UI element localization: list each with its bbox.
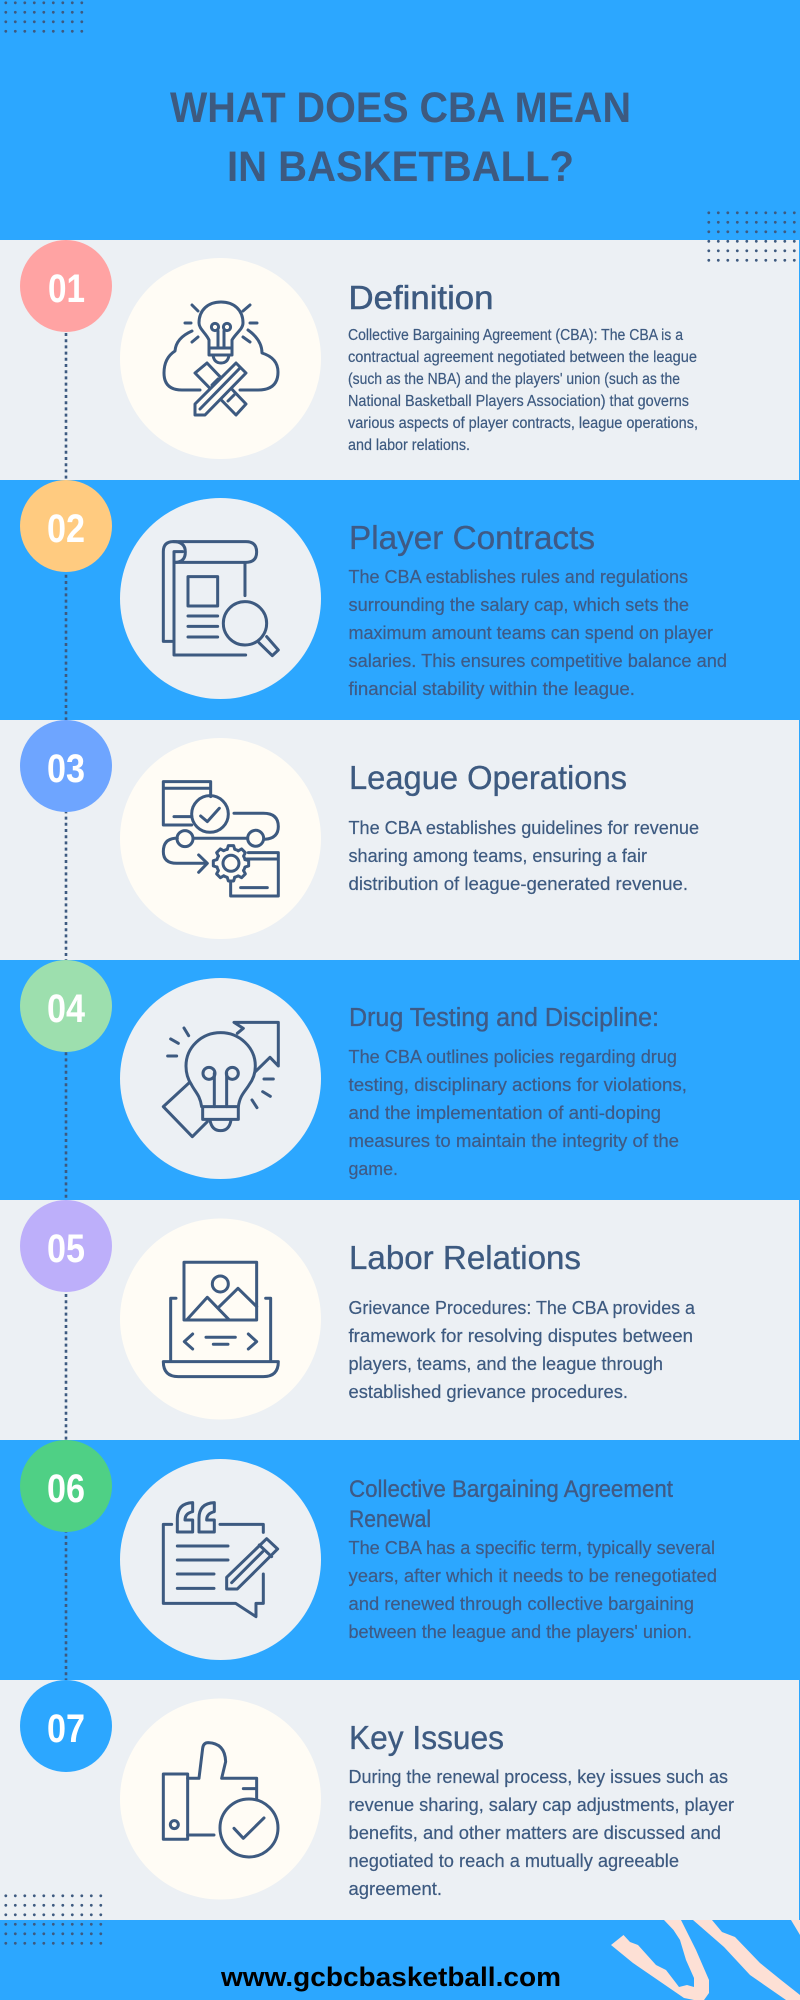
body text: definition xyxy=(348,327,698,454)
title xyxy=(170,84,631,191)
icon: bulb over cloud with crossed tools xyxy=(164,302,278,415)
body text: definition: Collective Bargaining Agreement (CBA): The CBA is a xyxy=(348,327,683,344)
body text: key issues: negotiated to reach a mutually agreeable xyxy=(348,1851,679,1871)
number badge 05 xyxy=(20,1200,112,1292)
panel: 03 league operations xyxy=(20,720,699,939)
body text: drug testing: and the implementation of anti-doping xyxy=(348,1103,661,1123)
body text: league operations: sharing among teams, ensuring a fair xyxy=(348,846,647,866)
body text: drug testing: measures to maintain the integrity of the xyxy=(348,1131,679,1151)
heading: collective bargaining agreement renewal: Collective Bargaining Agreement xyxy=(349,1476,673,1503)
heading: key issues: Key Issues xyxy=(349,1719,504,1756)
number badge 05: 05 xyxy=(47,1227,85,1271)
body text: key issues: During the renewal process, key issues such as xyxy=(348,1767,728,1787)
number badge 04 xyxy=(20,960,112,1052)
heading: drug testing and discipline: Drug Testing and Discipline: xyxy=(349,1004,659,1032)
number badge 07: 07 xyxy=(47,1707,85,1751)
panel: 06 agreement renewal xyxy=(20,1440,717,1660)
body text: labor relations: established grievance procedures. xyxy=(348,1382,628,1402)
body text: key issues: benefits, and other matters are discussed and xyxy=(348,1823,721,1843)
number badge 01: 01 xyxy=(48,267,85,311)
icon: document with magnifier xyxy=(163,542,278,656)
body text: definition: contractual agreement negotiated between the league xyxy=(348,349,697,366)
number badge 02 xyxy=(20,480,112,572)
panel: 02 player contracts xyxy=(20,480,727,699)
body text: drug testing: The CBA outlines policies regarding drug xyxy=(348,1047,677,1067)
icon circle 04 xyxy=(120,978,321,1179)
body text: definition: and labor relations. xyxy=(348,437,470,454)
icon circle 03 xyxy=(120,738,321,939)
body text: player contracts: maximum amount teams can spend on player xyxy=(348,623,713,643)
panel: 07 key issues xyxy=(20,1680,734,1900)
body text: key issues xyxy=(348,1767,734,1899)
icon circle 02 xyxy=(120,498,321,699)
body text: agreement renewal: The CBA has a specific term, typically several xyxy=(348,1538,715,1558)
icon circle 06 xyxy=(120,1459,321,1660)
body text: player contracts: financial stability within the league. xyxy=(348,679,635,699)
icon circle 07 xyxy=(120,1698,321,1900)
body text: league operations: distribution of league-generated revenue. xyxy=(348,874,688,894)
body text: drug testing xyxy=(348,1047,687,1179)
body text: drug testing: game. xyxy=(348,1159,398,1179)
number badge 07 xyxy=(20,1680,112,1772)
icon circle 05 xyxy=(120,1218,321,1420)
body text: player contracts: The CBA establishes rules and regulations xyxy=(348,567,688,587)
body text: agreement renewal: between the league and the players' union. xyxy=(348,1622,692,1642)
body text: definition: various aspects of player contracts, league operations, xyxy=(348,415,698,432)
number badge 01 xyxy=(20,240,112,332)
body text: agreement renewal xyxy=(348,1538,717,1642)
icon circle 01 xyxy=(120,258,321,459)
body text: player contracts: surrounding the salary cap, which sets the xyxy=(348,595,689,615)
body text: definition: National Basketball Players Association) that governs xyxy=(348,393,689,410)
icon: bulb with arrow xyxy=(163,1022,278,1137)
body text: agreement renewal: years, after which it needs to be renegotiated xyxy=(348,1566,717,1586)
body text: definition: (such as the NBA) and the players' union (such as the xyxy=(348,371,680,388)
dot pattern: top left xyxy=(4,1,89,39)
number badge 03: 03 xyxy=(47,747,85,791)
timeline dotted connector xyxy=(65,333,67,1680)
number badge 02: 02 xyxy=(47,507,85,551)
body text: labor relations: Grievance Procedures: The CBA provides a xyxy=(348,1298,696,1318)
icon: quote bubble with pencil xyxy=(163,1503,278,1617)
heading: collective bargaining agreement renewal: Renewal xyxy=(349,1506,431,1533)
title: WHAT DOES CBA MEAN xyxy=(170,84,631,132)
heading: labor relations: Labor Relations xyxy=(349,1239,581,1276)
number badge 06 xyxy=(20,1440,112,1532)
body text: agreement renewal: and renewed through collective bargaining xyxy=(348,1594,694,1614)
body text: player contracts xyxy=(348,567,727,699)
number badge 03 xyxy=(20,720,112,812)
body text: labor relations xyxy=(348,1298,696,1402)
icon: workflow with gear xyxy=(163,782,278,896)
number badge 04: 04 xyxy=(47,987,86,1031)
icon: thumbs up with check xyxy=(163,1743,278,1857)
body text: league operations: The CBA establishes guidelines for revenue xyxy=(348,818,699,838)
heading: league operations: League Operations xyxy=(349,759,627,796)
body text: drug testing: testing, disciplinary actions for violations, xyxy=(348,1075,687,1095)
body text: key issues: agreement. xyxy=(348,1879,442,1899)
body text: player contracts: salaries. This ensures competitive balance and xyxy=(348,651,727,671)
heading: definition: Definition xyxy=(348,279,494,316)
panel: 04 drug testing and discipline xyxy=(20,960,687,1179)
panel: 05 labor relations xyxy=(20,1200,696,1420)
body text: labor relations: players, teams, and the league through xyxy=(348,1354,663,1374)
body text: key issues: revenue sharing, salary cap adjustments, player xyxy=(348,1795,734,1815)
body text: labor relations: framework for resolving disputes between xyxy=(348,1326,693,1346)
title: IN BASKETBALL? xyxy=(227,143,574,191)
heading: collective bargaining agreement renewal xyxy=(349,1476,673,1533)
header background xyxy=(0,0,800,240)
body text: league operations xyxy=(348,818,699,894)
dot pattern: top right xyxy=(707,211,800,268)
panel: 01 definition xyxy=(20,240,698,459)
dot pattern: bottom left xyxy=(4,1894,108,1951)
decorative brush strokes xyxy=(611,1920,800,2000)
number badge 06: 06 xyxy=(47,1467,85,1511)
heading: player contracts: Player Contracts xyxy=(349,519,595,556)
icon: laptop with picture xyxy=(163,1262,278,1377)
footer website url: www.gcbcbasketball.com xyxy=(220,1962,561,1992)
